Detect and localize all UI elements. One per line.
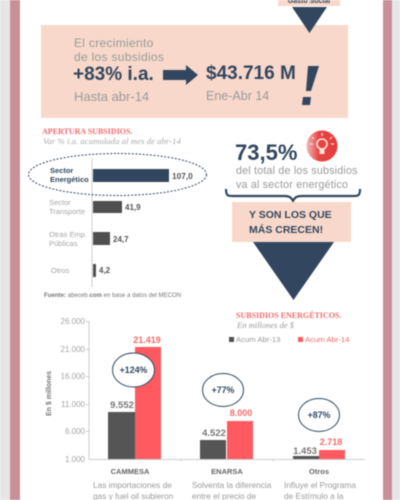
text: January to April 14: Ene-Abr 14 <box>206 89 269 103</box>
y axis labels: 26.000 <box>61 317 86 326</box>
text: until April 14: Hasta abr-14 <box>74 89 149 104</box>
bars: Otros: Otros <box>309 467 329 476</box>
icon: exclamation mark <box>301 65 320 106</box>
bars: ENARSA: 8.000 <box>230 408 252 418</box>
icon: light bulb <box>306 130 338 162</box>
text: CAMMESA description <box>92 480 174 500</box>
y axis labels: 1.000 <box>65 455 86 464</box>
bar: Sector Transporte: Transporte <box>49 207 85 216</box>
text: CAMMESA description: Las importaciones de <box>93 480 172 490</box>
heading title: SUBSIDIOS ENERGÉTICOS. <box>236 311 341 320</box>
bar: Sector Transporte: 41,9 <box>125 203 141 212</box>
bars: CAMMESA <box>108 335 161 476</box>
text: Otros description <box>284 480 356 500</box>
stat: +83% i.a.: +83% i.a. <box>73 64 154 85</box>
callout: and they grow the most: Y SON LOS QUE <box>249 209 332 221</box>
text: share of subsidies: del total de los subsidios <box>236 165 358 177</box>
panel: growth of subsidies <box>41 25 348 118</box>
bars: Otros: 2.718 <box>320 437 342 447</box>
icon: curly brace <box>224 188 362 203</box>
bar: Otras Emp. Públicas: 24,7 <box>113 235 129 244</box>
text: ENARSA description <box>192 480 272 500</box>
heading subtitle: Var % i.a. acumulada al mes de abr-14 <box>43 136 181 146</box>
icon: top triangle pointer <box>292 6 328 34</box>
y axis labels <box>61 317 86 464</box>
text: growth intro <box>74 36 164 64</box>
bars: ENARSA <box>200 408 253 476</box>
icon: large triangle pointer <box>252 241 334 300</box>
y axis labels: 6.000 <box>65 427 86 436</box>
bar: Sector Energético: 107,0 <box>172 171 193 181</box>
bar chart: energy subsidies <box>45 317 366 476</box>
bar: Otras Emp. Públicas <box>49 230 129 248</box>
bubble: +124%: +124% <box>120 365 147 375</box>
heading: energy subsidies <box>236 310 342 330</box>
y axis labels: 16.000 <box>61 372 86 381</box>
bar: Sector Energético: Sector <box>50 166 73 175</box>
bars: ENARSA: ENARSA <box>211 467 243 476</box>
stat: $43.716 M: $43.716 M <box>206 63 296 84</box>
bubble: +87%: +87% <box>308 410 331 420</box>
bars: Otros <box>293 437 345 476</box>
legend <box>228 335 350 344</box>
bar: Otros <box>51 264 111 277</box>
y axis labels: 11.000 <box>61 400 86 409</box>
bar: Otros: Otros <box>51 266 70 275</box>
bars: Otros: 1.453 <box>293 446 317 457</box>
bar chart: subsidies by sector <box>27 152 208 288</box>
text: ENARSA description: Solventa la diferencia <box>192 480 271 490</box>
callout: and they grow the most: MÁS CRECEN! <box>249 224 323 236</box>
bubble: +87% <box>298 398 340 432</box>
bar: Otras Emp. Públicas: Públicas <box>49 239 78 248</box>
callout: and they grow the most <box>232 202 351 242</box>
heading: subsidies breakdown <box>42 127 181 146</box>
bar: Otras Emp. Públicas: Otras Emp. <box>49 230 87 239</box>
bubble: +77% <box>202 374 244 406</box>
bar: Otros: 4,2 <box>99 266 111 275</box>
bar: Sector Energético <box>50 166 193 184</box>
y axis labels: 21.000 <box>61 345 86 354</box>
text: Otros description: Influye el Programa <box>284 480 356 490</box>
stat: 73,5%: 73,5% <box>235 140 297 165</box>
dashed ellipse highlight <box>28 154 206 196</box>
text: share of subsidies <box>236 165 358 191</box>
y axis title: En $ millones <box>46 371 53 416</box>
bars: CAMMESA: 21.419 <box>133 335 161 345</box>
bubble: +77%: +77% <box>212 385 235 395</box>
text: share of subsidies: va al sector energético <box>236 179 348 191</box>
bars: CAMMESA: 9.552 <box>110 400 134 411</box>
bars: ENARSA: 4.522 <box>202 428 226 439</box>
text: growth intro: de los subsidios <box>74 50 164 64</box>
icon: arrow <box>162 64 198 86</box>
heading subtitle: En millones de $ <box>237 320 294 330</box>
source note: Fuente: abeceb.com en base a datos del MECON <box>44 292 181 299</box>
bar: Sector Energético: Energético <box>50 175 89 184</box>
bar: Sector Transporte <box>49 198 141 216</box>
heading title: APERTURA SUBSIDIOS. <box>42 127 132 136</box>
tag: gasto social <box>278 0 340 6</box>
text: growth intro: El crecimiento <box>74 36 154 50</box>
bar: Sector Transporte: Sector <box>49 198 71 207</box>
bars: CAMMESA: CAMMESA <box>111 467 150 476</box>
bubble: +124% <box>112 353 154 387</box>
legend: Acum Abr-13: Acum Abr-13 <box>236 335 280 344</box>
legend: Acum Abr-14: Acum Abr-14 <box>305 335 349 344</box>
